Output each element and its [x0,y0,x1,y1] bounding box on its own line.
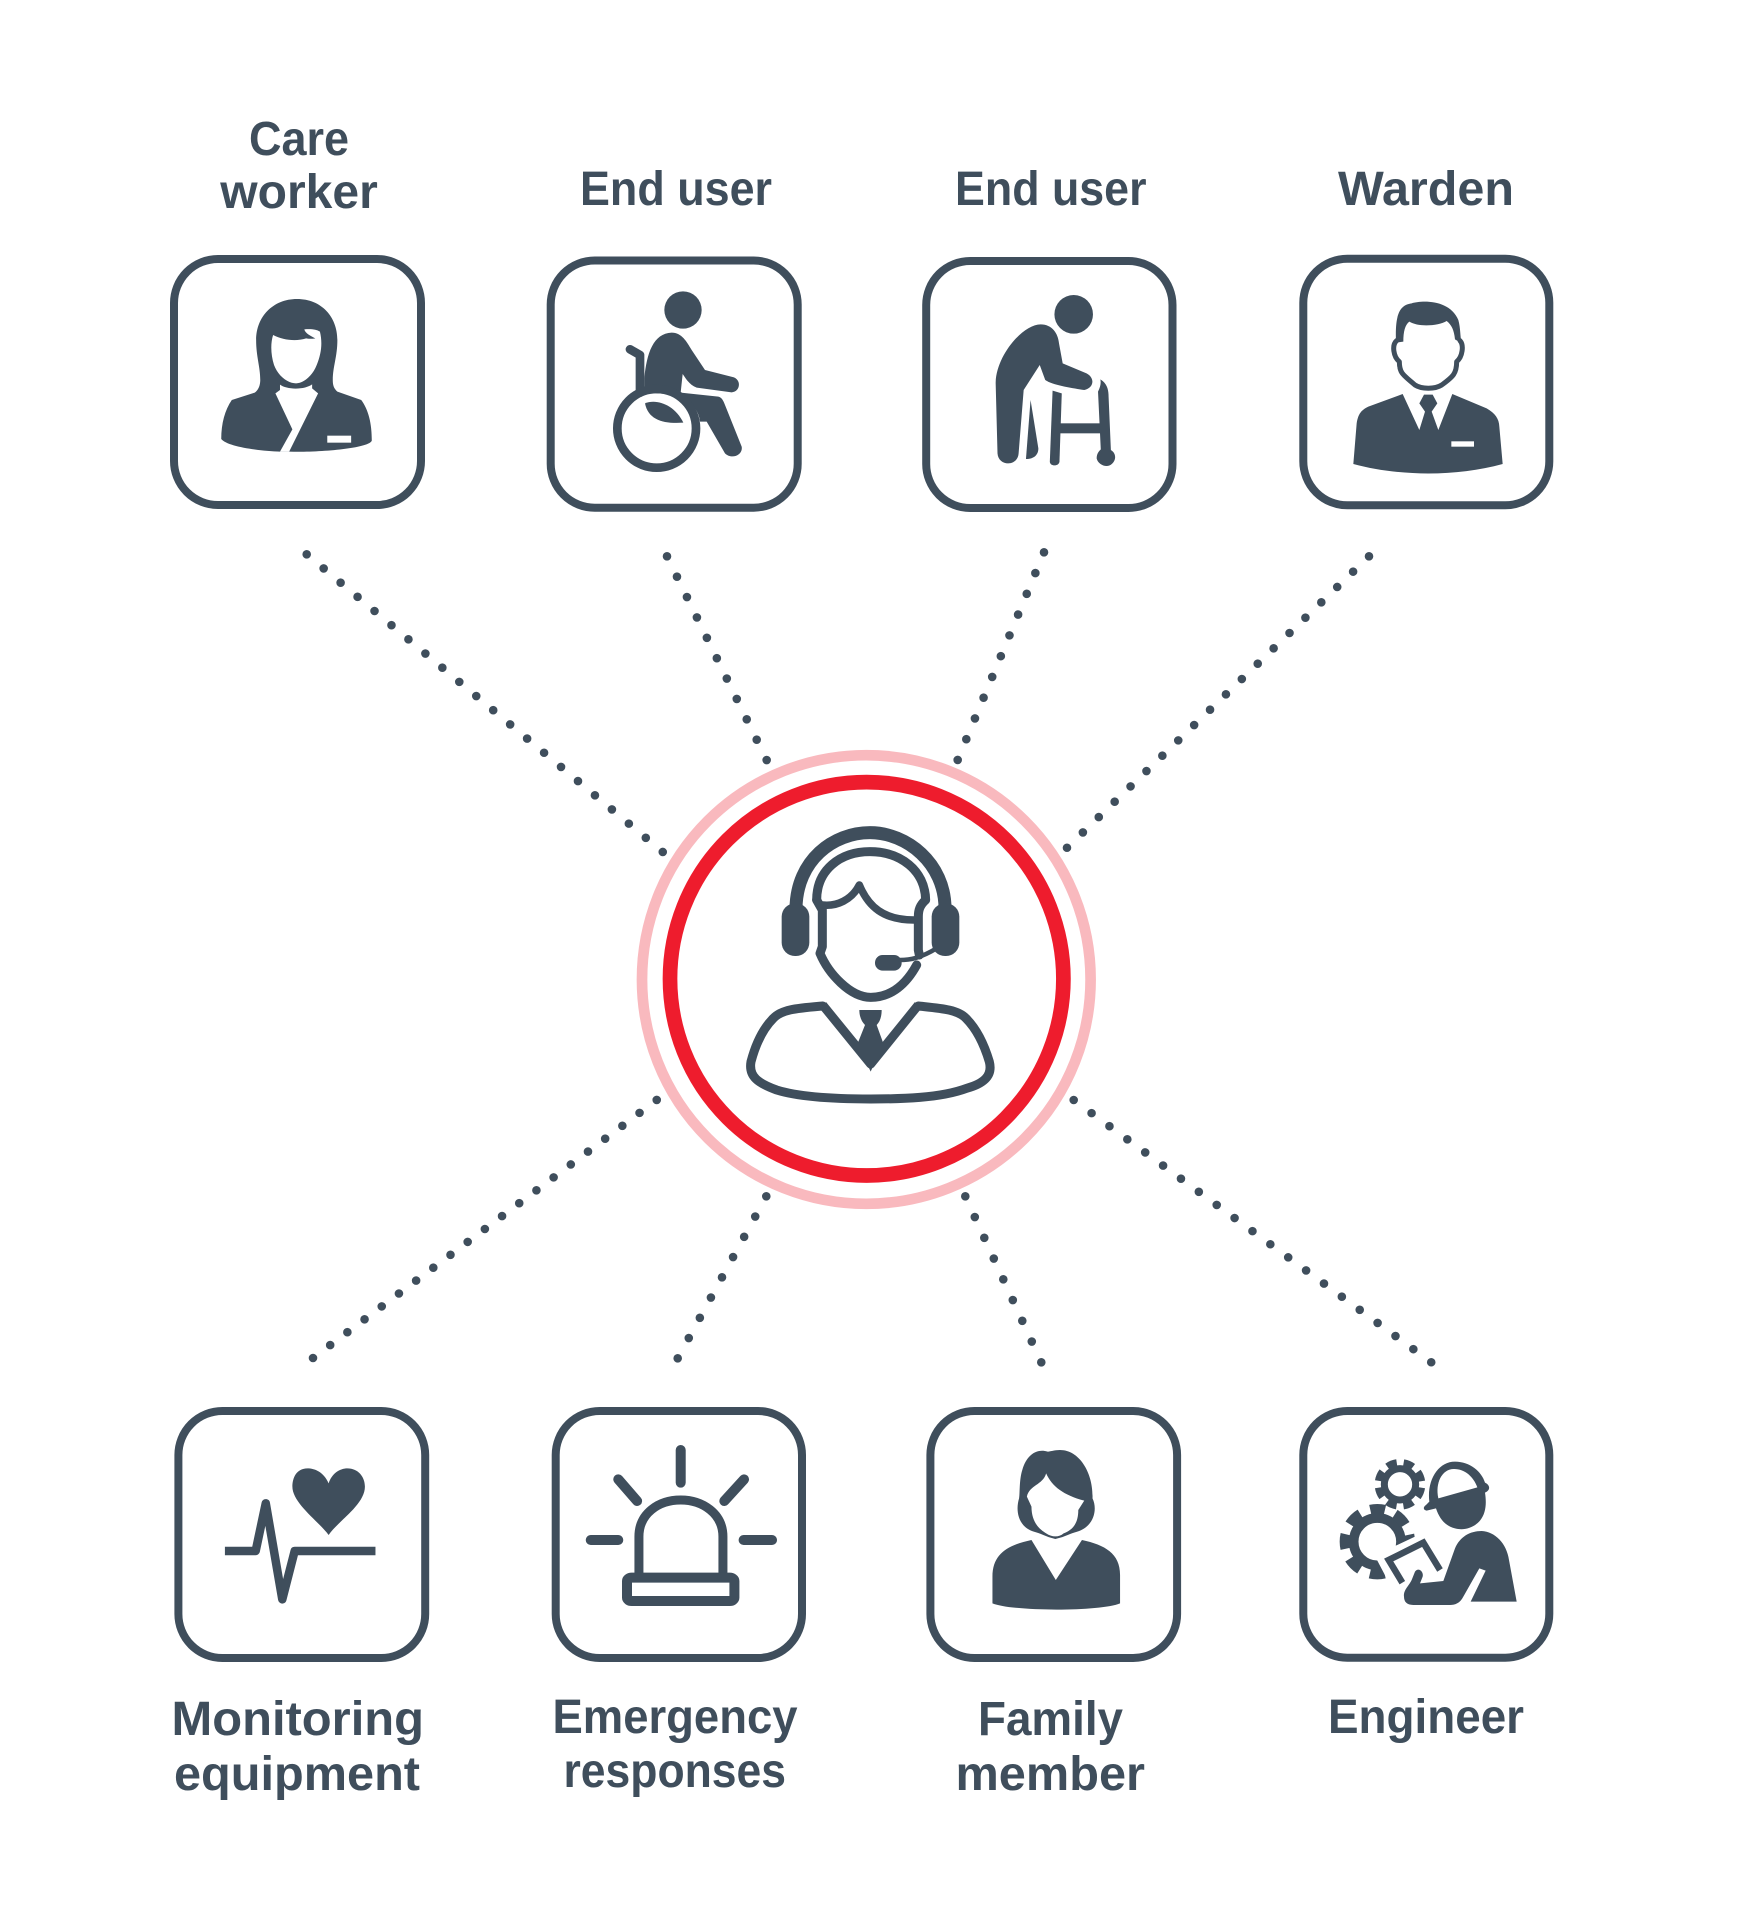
connector: warden to operator [1066,556,1369,848]
card: monitoring equipment [178,1411,425,1658]
label: Warden: Warden [1338,163,1514,216]
card frame [174,259,421,505]
outer pink ring [642,755,1091,1204]
label: Monitoring equipment: Monitoring [172,1693,424,1746]
card: family member [930,1411,1177,1658]
connector: walker end user to operator [957,552,1044,761]
label: Emergency responses: responses [564,1745,786,1798]
label: End user (wheelchair): End user [580,163,772,216]
card frame [1303,259,1549,505]
connector: care worker to operator [307,554,664,853]
icon: wheelchair user [617,291,742,468]
connector: engineer to operator [1074,1100,1432,1363]
card: end user in wheelchair [551,260,798,508]
label: Monitoring equipment: equipment [174,1748,420,1801]
icon: heart and pulse line [225,1468,375,1599]
icon: emergency beacon [591,1450,772,1601]
card frame [551,260,798,508]
card frame [926,261,1172,508]
label: Monitoring equipment [172,1693,424,1801]
card: warden [1303,259,1549,505]
label: Family member: member [956,1748,1145,1801]
label: End user (walker): End user [955,163,1146,216]
label: Engineer: Engineer [1328,1691,1524,1744]
card frame [178,1411,425,1658]
connector: wheelchair end user to operator [667,556,767,761]
label: Care worker: worker [219,166,378,219]
label: Care worker [219,113,378,219]
icon: person with walking frame [996,295,1115,466]
card frame [556,1411,802,1658]
connector: family member to operator [965,1196,1042,1363]
icon: headset operator [751,833,990,1099]
label: Emergency responses: Emergency [552,1691,798,1744]
connector: emergency responses to operator [678,1195,767,1358]
icon: engineer with gears and tablet [1345,1462,1517,1605]
icon: woman family member [992,1450,1120,1610]
icon: warden man in suit [1353,302,1503,473]
card: emergency responses [556,1411,802,1658]
card: care worker [174,259,421,505]
connector: monitoring equipment to operator [313,1099,658,1358]
card frame [930,1411,1177,1658]
central operator hub [642,755,1091,1204]
card: end user with walker [926,261,1172,508]
label: Family member [956,1693,1145,1801]
inner red ring [670,782,1063,1176]
label: Care worker: Care [249,113,349,166]
label: Family member: Family [978,1693,1123,1746]
icon: care worker woman [221,299,372,452]
card frame [1303,1411,1549,1658]
card: engineer [1303,1411,1549,1658]
label: Emergency responses [552,1691,798,1798]
